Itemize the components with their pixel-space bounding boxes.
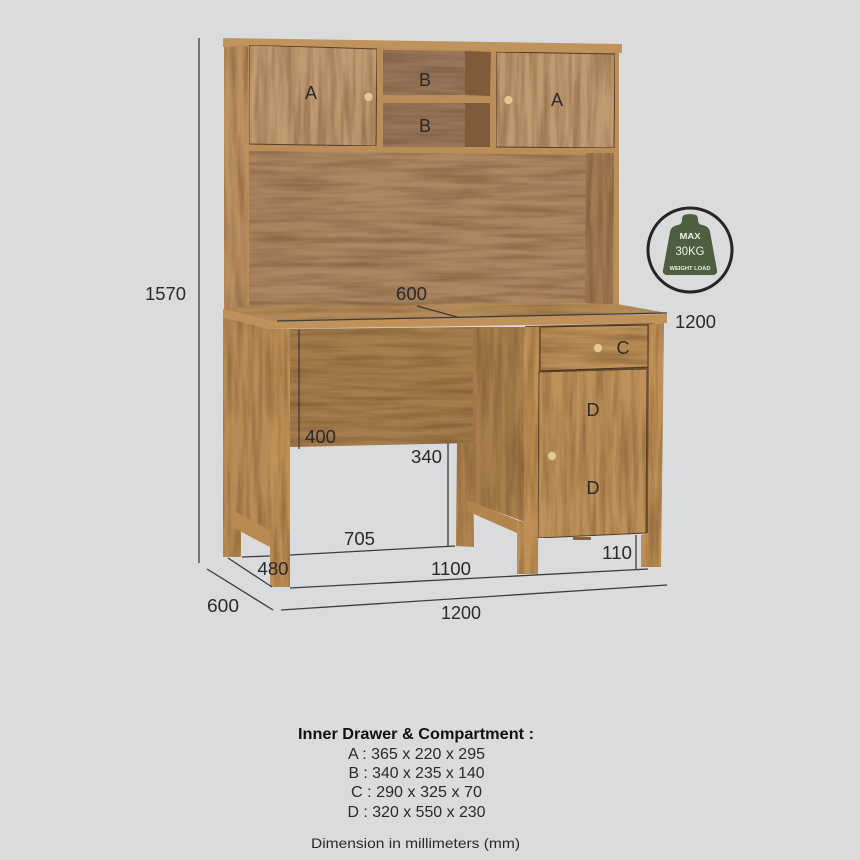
list rows: A : 365 x 220 x 295 (348, 746, 485, 763)
knobs (364, 92, 602, 460)
compartment letters: C (616, 338, 630, 358)
weight load badge (648, 208, 732, 292)
badge text: MAX (680, 231, 701, 241)
units note: Dimension in millimeters (mm) (311, 835, 520, 851)
compartment letters: B (419, 70, 431, 90)
right door (496, 52, 615, 148)
desk with hutch (223, 38, 667, 587)
list rows: D : 320 x 550 x 230 (348, 804, 486, 821)
pedestal side panel (473, 327, 525, 522)
desktop surface (223, 304, 667, 321)
desk base (223, 304, 667, 587)
dimension labels: 1200 (441, 603, 481, 623)
list rows: C : 290 x 325 x 70 (351, 784, 482, 801)
dimension labels: 1200 (675, 312, 716, 332)
pedestal back leg (456, 443, 474, 547)
dimension labels: 705 (344, 529, 375, 549)
dimension labels: 1570 (145, 284, 186, 304)
left side panel (223, 317, 270, 557)
compartment letters: D (586, 478, 600, 498)
dimension labels: 600 (396, 284, 427, 304)
compartment dimensions list (298, 726, 534, 851)
badge text (670, 231, 711, 272)
top cap (223, 38, 622, 53)
cabinet drawer (540, 325, 648, 371)
dimension labels (145, 284, 716, 623)
lower niche (383, 103, 465, 147)
hutch left side panel (224, 46, 248, 312)
compartment letters: A (305, 83, 317, 103)
cabinet door (538, 369, 647, 538)
compartment letters: B (419, 116, 431, 136)
front left leg (270, 329, 290, 587)
dimension labels: 480 (258, 559, 288, 579)
dimension labels: 600 (207, 596, 239, 616)
compartment letters: A (551, 90, 563, 110)
weight icon (663, 214, 717, 275)
list rows (348, 746, 486, 821)
desktop front edge (270, 314, 667, 329)
right inner side (585, 153, 614, 305)
badge text: WEIGHT LOAD (670, 266, 711, 272)
compartment letters (305, 70, 630, 498)
back panel (249, 151, 586, 307)
cabinet backing (525, 323, 655, 538)
list rows: B : 340 x 235 x 140 (348, 765, 485, 782)
left door (249, 45, 377, 146)
side panel rail (232, 510, 270, 547)
compartment letters: D (586, 400, 600, 420)
list heading: Inner Drawer & Compartment : (298, 726, 534, 743)
modesty panel (290, 327, 473, 447)
lower niche side (465, 103, 490, 147)
center front post (517, 327, 539, 574)
dimension labels: 400 (305, 427, 336, 447)
hutch (223, 38, 622, 312)
dimension labels: 1100 (431, 559, 471, 579)
dimension lines (199, 38, 667, 610)
upper niche side (465, 51, 491, 96)
upper niche (383, 50, 465, 95)
badge text: 30KG (676, 246, 705, 258)
dimension labels: 110 (602, 543, 632, 563)
pedestal rail (467, 500, 517, 533)
dimension labels: 340 (411, 447, 442, 467)
cabinet foot (573, 537, 591, 540)
desktop left edge (223, 309, 270, 329)
hutch backing frame (224, 42, 619, 312)
right post (641, 323, 664, 567)
